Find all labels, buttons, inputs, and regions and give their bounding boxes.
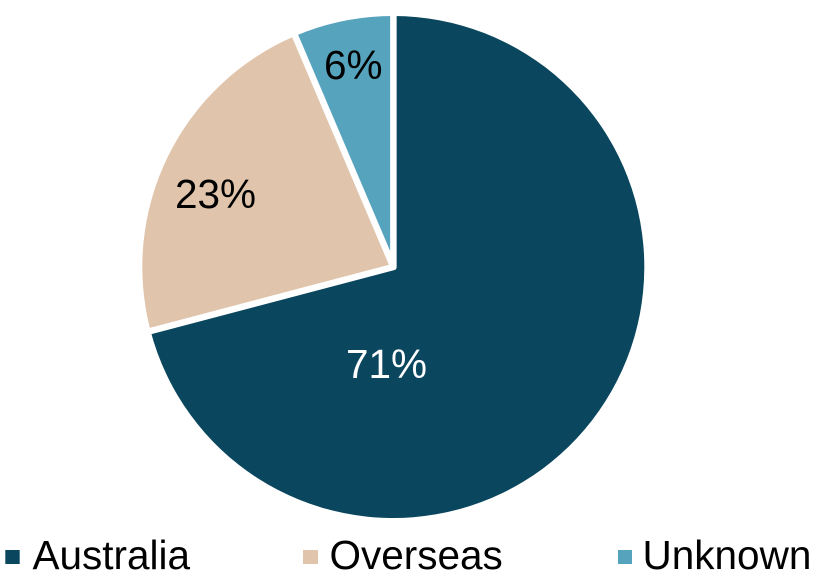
label: 71%: 71% xyxy=(346,341,427,387)
slice: Overseas 23% xyxy=(142,36,393,331)
legend item: Overseas: Overseas xyxy=(330,532,503,578)
slice: Australia 71% xyxy=(151,16,644,518)
legend item: Unknown: Unknown xyxy=(642,532,811,578)
legend xyxy=(5,532,811,578)
legend item: Australia: Australia xyxy=(32,532,191,578)
slice: Unknown 6% xyxy=(295,16,393,267)
pie chart xyxy=(142,10,644,518)
label: 23%: 23% xyxy=(175,171,256,217)
label: 6%: 6% xyxy=(324,42,383,88)
